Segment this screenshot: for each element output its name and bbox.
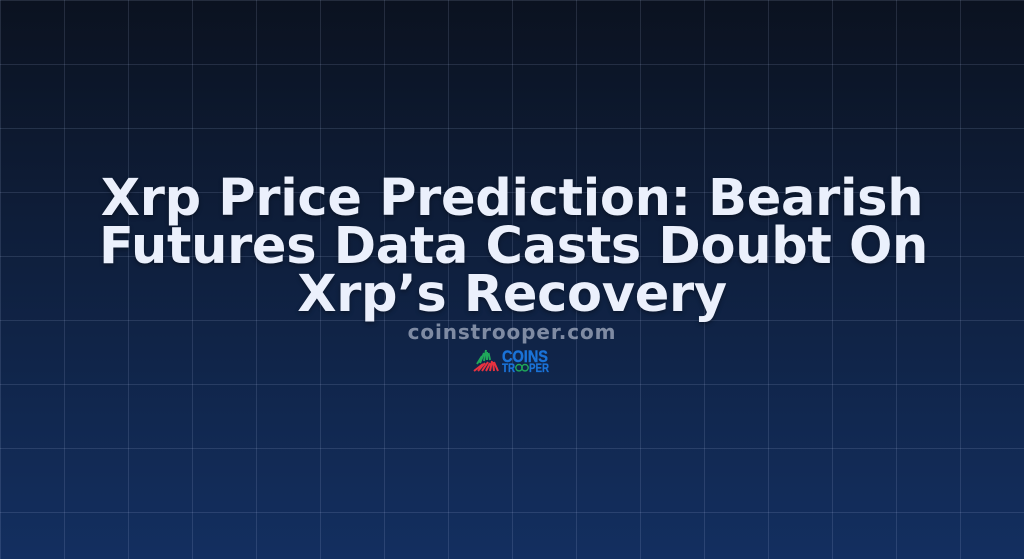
title: Xrp’s Recovery [297,265,727,324]
title [99,169,928,326]
logo: Coins Trooper [473,348,549,374]
title: Futures Data Casts Doubt On [99,217,928,276]
source site: coinstrooper.com [408,320,616,344]
wordmark [502,348,549,375]
title: Xrp Price Prediction: Bearish [101,169,923,228]
icon: green and red chart peak [474,350,498,371]
